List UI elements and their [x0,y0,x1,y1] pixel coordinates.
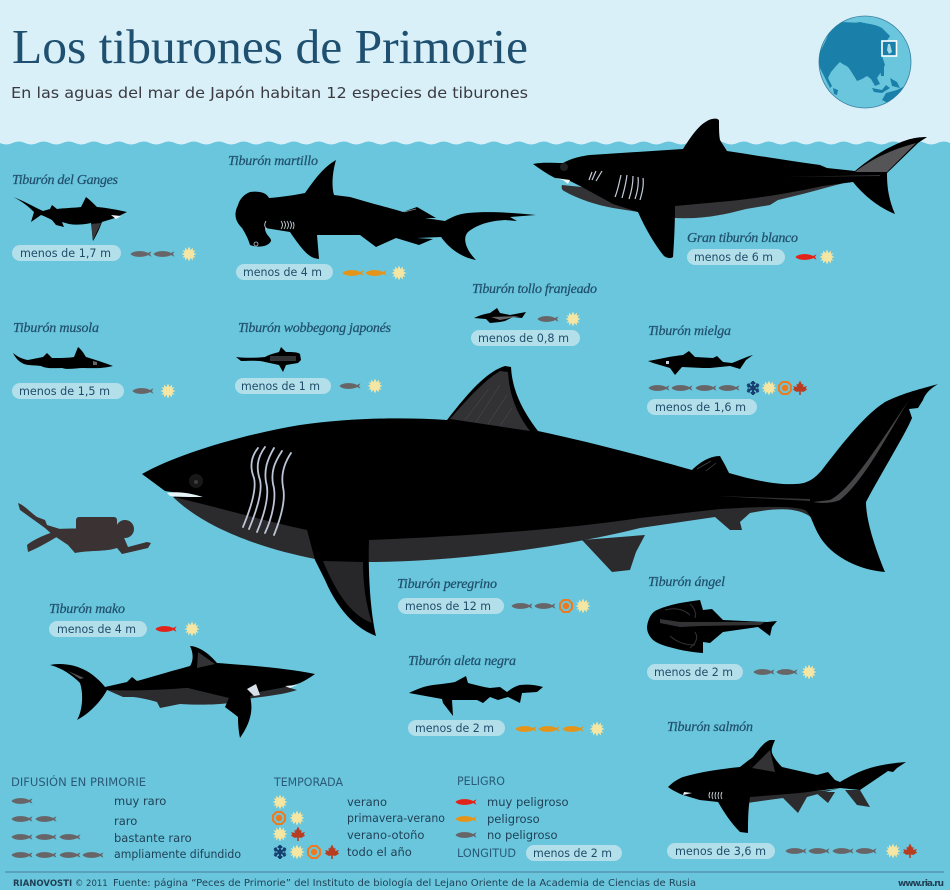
stats: martillo: menos de 4 m [243,265,322,279]
tail stripe [813,400,909,503]
legend: longitud: LONGITUD [457,846,516,860]
legend: difusión en Primorie: muy raro [114,794,166,808]
pectoral fin [323,561,372,623]
stats: wobbegong [235,378,382,394]
legend: temporada: verano-otoño [347,828,424,842]
legend: temporada: verano [347,795,387,809]
stats: gran tiburón blanco [687,249,834,265]
stats: peregrino: menos de 12 m [405,599,491,613]
stats: musola: menos de 1,5 m [19,384,110,398]
shark: tiburón musola [13,347,113,369]
pelvic fin [582,535,645,572]
species label: Tiburón peregrino: Tiburón peregrino [397,577,497,592]
legend: peligro: no peligroso [487,828,558,842]
legend: temporada: primavera-verano [347,811,445,825]
legend: difusión en Primorie: raro [114,814,137,828]
shark: tiburón wobbegong japonés [236,347,301,372]
dorsal fin [450,371,530,431]
shark: tiburón del Ganges [13,197,127,241]
species label: Tiburón mako: Tiburón mako [49,602,125,617]
shark: tiburón mako [50,646,315,738]
locator square: Sea of Japan [882,41,896,56]
shark: gran tiburón blanco [533,119,927,258]
legend: peligro: PELIGRO [457,774,505,788]
diver [18,503,151,554]
shark: tiburón mielga [648,351,753,375]
shark: tiburón ángel [647,600,777,653]
stats: tollo franjeado [471,312,580,346]
stats: ángel: menos de 2 m [654,665,733,679]
species label: Tiburón del Ganges: Tiburón del Ganges [12,173,119,188]
species label: Tiburón tollo franjeado: Tiburón tollo franjeado [472,282,597,297]
stats: musola [12,383,176,399]
stats: Ganges: menos de 1,7 m [20,246,111,260]
species label: Tiburón mielga: Tiburón mielga [648,324,731,339]
species label: Gran tiburón blanco: Gran tiburón blanco [687,231,798,246]
stats: mako [49,621,200,637]
legend: temporada: todo el año [347,845,412,859]
species label: Tiburón musola: Tiburón musola [13,321,99,336]
belly [173,490,812,562]
stats: wobbegong: menos de 1 m [241,379,320,393]
species label: Tiburón aleta negra: Tiburón aleta negra [408,654,516,669]
legend: temporada [272,775,445,860]
species label: Tiburón wobbegong japonés: Tiburón wobbegong japonés [238,321,392,336]
title: Los tiburones de Primorie [12,19,528,74]
second dorsal [697,461,716,471]
shark: tiburón tollo franjeado [474,308,526,323]
legend: longitud: menos de 2 m [533,846,612,860]
stats: mielga: menos de 1,6 m [655,400,746,414]
legend: difusión en Primorie: bastante raro [114,831,192,845]
footer: credit: RIANOVOSTI © 2011 [13,879,108,889]
legend: peligro: peligroso [487,812,540,826]
footer: website: www.ria.ru [898,879,944,889]
shark: tiburón salmón [668,740,906,833]
stats: salmón: menos de 3,6 m [675,844,766,858]
subtitle: En las aguas del mar de Japón habitan 12 especies de tiburones [11,84,528,102]
legend: peligro [456,774,569,842]
stats: gran tiburón blanco: menos de 6 m [694,250,773,264]
globe locator map [818,16,912,108]
stats: mielga [647,380,807,415]
stats: mako: menos de 4 m [57,622,136,636]
legend: difusión en Primorie: ampliamente difundido [114,847,241,861]
footer: source: Fuente: página “Peces de Primorie” del Instituto de biología del Lejano Oriente de la Academia de Ciencias de Rusia [113,878,696,889]
eye [189,474,203,488]
shark: tiburón martillo [235,160,536,260]
stats: aleta negra: menos de 2 m [415,721,494,735]
legend: temporada: TEMPORADA [273,775,343,789]
legend: difusión en Primorie: DIFUSIÓN EN PRIMORIE [11,774,146,789]
shark: tiburón aleta negra [409,676,543,716]
stats: ángel [647,664,816,680]
legend: longitud [457,845,622,861]
stats: tollo franjeado: menos de 0,8 m [478,331,569,345]
stats: martillo [236,264,406,280]
stats: peregrino [398,598,590,614]
stats: aleta negra [408,720,604,736]
legend: difusión en Primorie [11,774,241,861]
teeth [167,492,203,497]
species label: Tiburón ángel: Tiburón ángel [648,575,725,590]
stats: salmón [667,843,917,859]
stats: Ganges [12,245,196,262]
species label: Tiburón salmón: Tiburón salmón [667,720,753,735]
species label: Tiburón martillo: Tiburón martillo [228,154,318,169]
legend: peligro: muy peligroso [487,795,569,809]
gill slits [243,447,291,535]
shark: tiburón peregrino (giant silhouette) [142,366,938,636]
sky header band with wave edge [0,0,950,144]
body [142,366,938,636]
